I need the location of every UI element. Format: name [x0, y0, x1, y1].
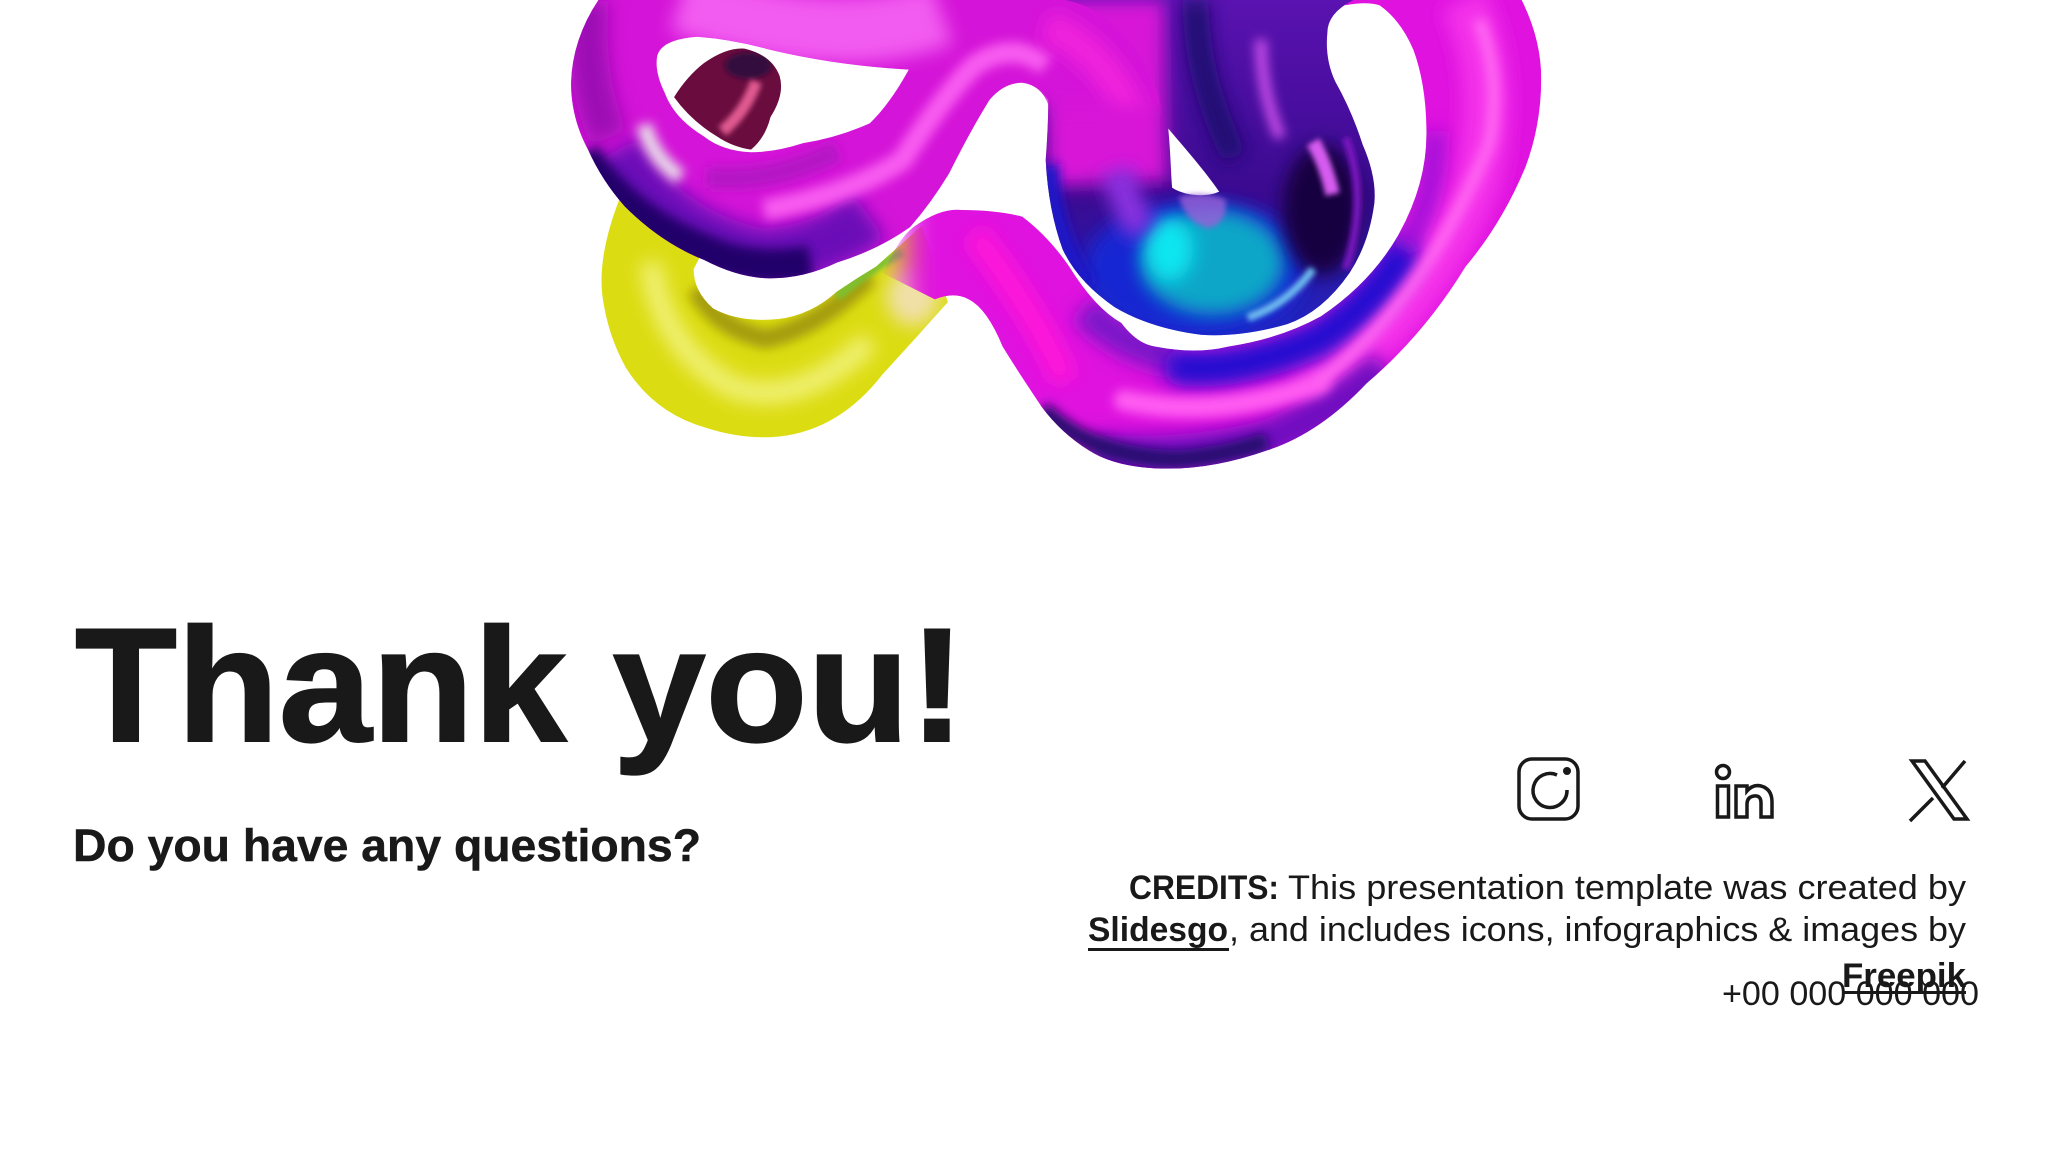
- credits text: [1088, 869, 1966, 995]
- white gap between tubes: [1168, 129, 1219, 195]
- yellow tube: [602, 200, 948, 438]
- credits text: Slidesgo: [1088, 911, 1228, 949]
- credits text: This presentation template was created by: [1288, 869, 1966, 907]
- phone number: +00 000 000 000: [1722, 975, 1979, 1013]
- title: Thank you!: [75, 595, 965, 776]
- icon: Instagram: [1519, 759, 1578, 819]
- knot detail: [1179, 194, 1226, 228]
- glossy fluid 3D shape: [550, 0, 1567, 486]
- credits text: , and includes icons, infographics & images by: [1229, 911, 1966, 949]
- icon: LinkedIn: [1716, 766, 1772, 817]
- dark tube and cyan bowl: [1042, 0, 1375, 336]
- magenta lower tube: [863, 0, 1567, 486]
- dark red inner bean: [674, 48, 782, 150]
- subtitle: Do you have any questions?: [73, 820, 701, 871]
- credits text: Freepik: [1842, 957, 1966, 995]
- magenta upper loop: [571, 0, 1162, 278]
- credits text: CREDITS:: [1129, 869, 1279, 907]
- icon: X: [1910, 761, 1967, 821]
